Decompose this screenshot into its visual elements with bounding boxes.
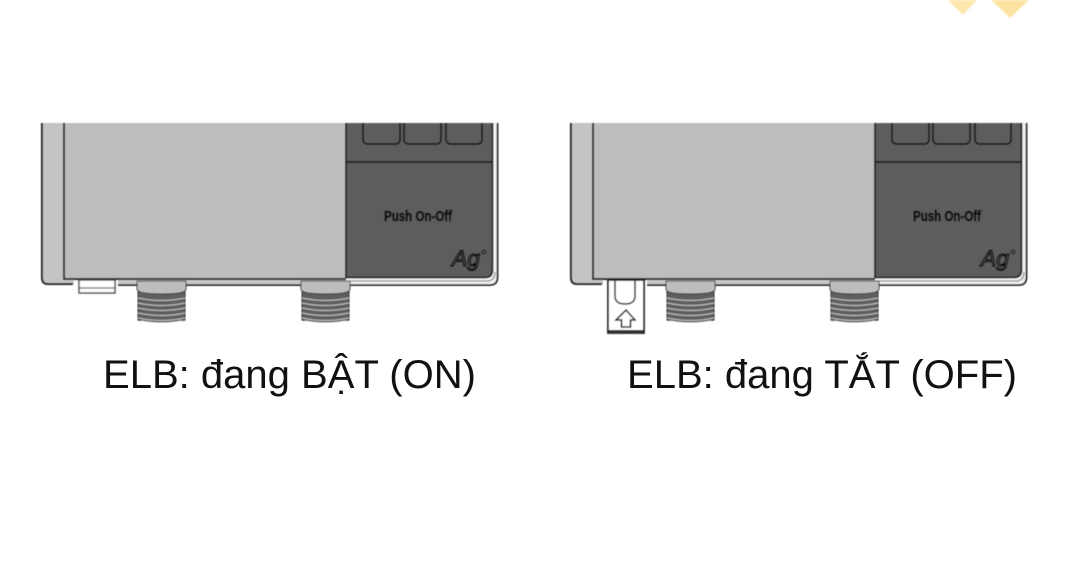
caption: on: ELB: đang BẬT (ON) [103, 352, 476, 397]
connector: left [137, 281, 186, 323]
label: Push On-Off: Push On-Off [913, 208, 982, 225]
logo: Ag: Ag [450, 246, 481, 271]
ELB slider pulled out with arrow [608, 280, 644, 333]
ELB slider pushed in [79, 280, 115, 293]
connector: right [301, 281, 350, 323]
device: ELB on [42, 123, 498, 323]
connector: left [666, 281, 715, 323]
device body [571, 123, 1027, 285]
label: Push On-Off: Push On-Off [384, 208, 453, 225]
device body [42, 123, 498, 285]
connector: right [830, 281, 879, 323]
panel: ELB on [42, 123, 498, 397]
caption: off: ELB: đang TẮT (OFF) [627, 351, 1017, 397]
decorative logo fragment [948, 0, 1029, 18]
logo: Ag: Ag [979, 246, 1010, 271]
panel: ELB off [571, 123, 1027, 397]
icon: up arrow [616, 310, 635, 327]
device: ELB off [571, 123, 1027, 333]
